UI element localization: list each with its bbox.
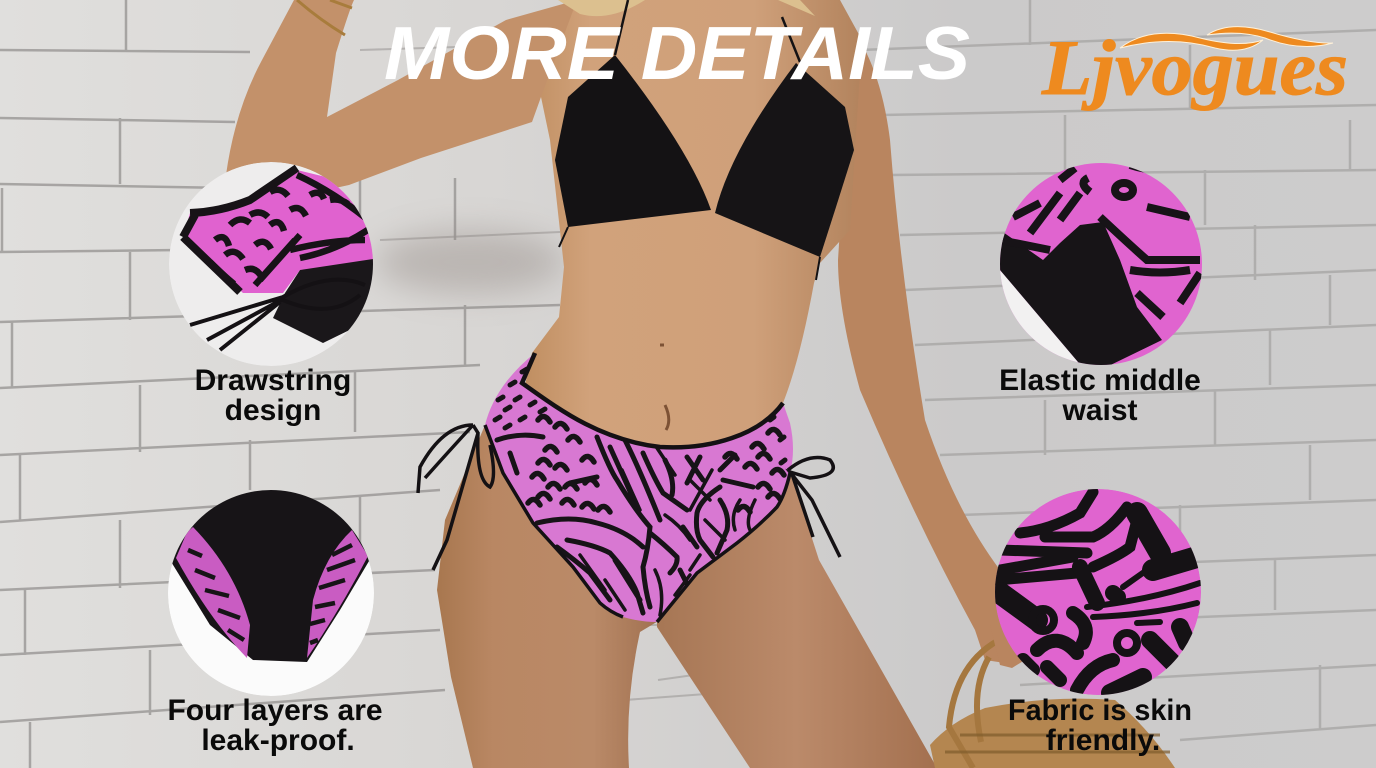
logo swoosh [1120,27,1333,50]
left drawstring [418,425,494,570]
feature: four layers leak-proof: leak-proof. [201,724,355,757]
caption: waist: Elastic middle [999,364,1201,397]
right leg [655,470,937,768]
arm shadow on wall [375,230,565,294]
logo wordmark: Ljvogues [1041,24,1348,111]
circle image: drawstring [169,162,380,366]
raised arm [226,0,610,200]
left leg [437,425,660,768]
circle image: leak-proof gusset [168,488,374,696]
leopard marks [528,416,784,512]
feature: elastic middle waist [995,160,1205,427]
lower arm [838,20,1005,663]
wicker basket [930,625,1175,768]
caption: leak-proof: Four layers are [167,694,383,727]
hair [558,0,815,16]
feature: four layers leak-proof [167,488,383,757]
hand [990,625,1025,668]
right drawstring [788,458,840,557]
feature: fabric is skin friendly: friendly. [1046,724,1160,757]
caption: skin friendly: Fabric is skin [1008,694,1192,727]
logo: Ljvogues [1041,24,1348,111]
pink animal-print bottom [418,353,840,622]
caption: drawstring: Drawstring [195,364,351,397]
circle image: fabric swirl [995,489,1201,695]
black halter top [555,0,854,280]
title: MORE DETAILS [384,11,970,95]
zebra stripes [497,435,753,613]
model figure [226,0,1005,768]
torso and legs [500,0,862,500]
feature: drawstring design: design [225,394,321,427]
navel [660,345,669,430]
bracelet [297,0,352,35]
circle image: waist [995,160,1205,375]
feature: drawstring design [169,162,380,427]
feature: elastic middle waist: waist [1061,394,1138,427]
feature: fabric is skin friendly [995,489,1201,757]
